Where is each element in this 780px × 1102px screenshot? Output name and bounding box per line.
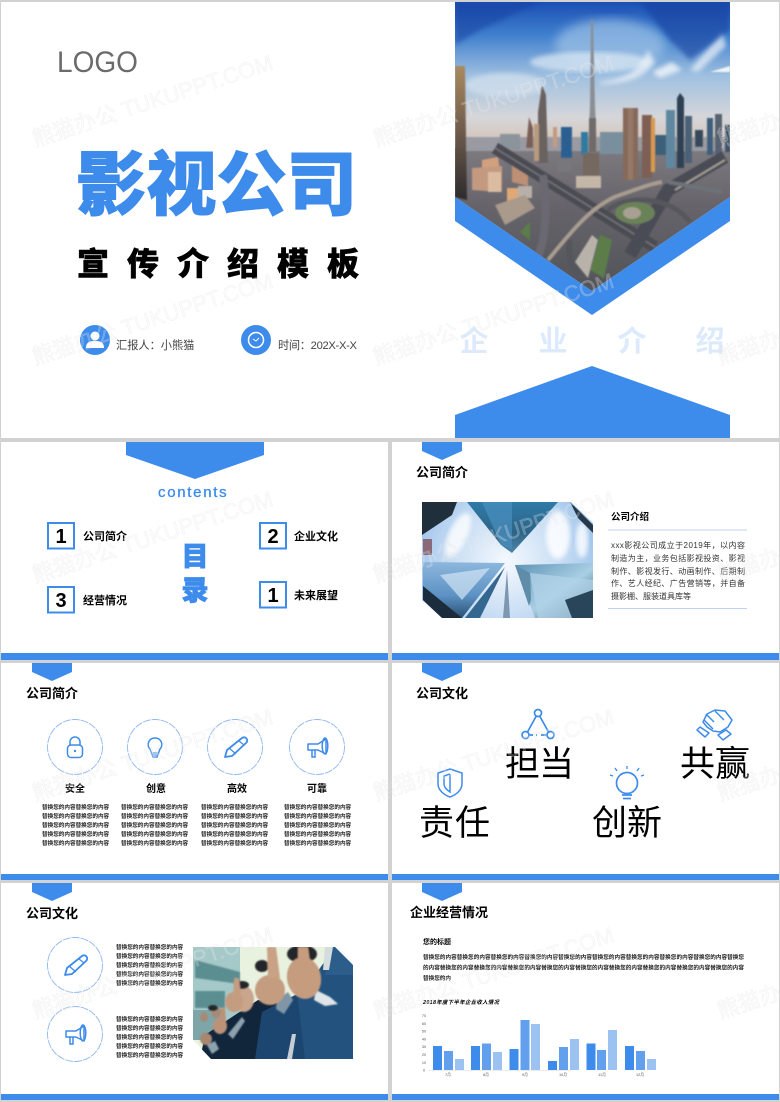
column: creativity: 替换您的内容替换您的内容 (121, 821, 189, 829)
keyword: win-win: 共赢 (680, 745, 750, 784)
watermarks: 熊猫办公 TUKUPPT.COM (29, 922, 276, 1024)
column: reliability: 替换您的内容替换您的内容 (284, 830, 352, 838)
intro paragraph: 制作、影视发行、动画制作、后期制 (611, 566, 745, 576)
main title: 影视公司 (76, 146, 357, 224)
vertical heading: 录 (182, 576, 208, 606)
intro paragraph: 制造为主，业务包括影视投资、影视 (611, 553, 745, 563)
bar chart (422, 1014, 656, 1077)
heading: 公司文化 (26, 906, 78, 921)
item 1: 1 (55, 526, 67, 548)
column: creativity: 替换您的内容替换您的内容 (121, 803, 189, 811)
watermarks: 熊猫办公 TUKUPPT.COM (29, 268, 276, 370)
skyscraper photo (422, 502, 593, 618)
item 4 (260, 582, 338, 608)
blue bottom bar (1, 874, 388, 880)
column: reliability: 替换您的内容替换您的内容 (284, 812, 352, 820)
y axis labels: 60 (422, 1022, 426, 1026)
column: creativity (121, 720, 189, 847)
body text (423, 953, 744, 982)
keyword: duty: 责任 (419, 804, 490, 843)
y axis labels: 10 (422, 1061, 426, 1065)
blue chevron band (455, 197, 730, 315)
skyline (455, 20, 730, 225)
text block 2: 替换您的内容替换您的内容 (116, 1015, 184, 1023)
x axis labels (445, 1072, 644, 1077)
text block 1: 替换您的内容替换您的内容 (116, 970, 184, 978)
column: creativity: 替换您的内容替换您的内容 (121, 830, 189, 838)
intro heading: 公司介绍 (611, 511, 649, 523)
text block 2: 替换您的内容替换您的内容 (116, 1042, 184, 1050)
company intro pale label: 业 (538, 325, 568, 358)
watermarks: 熊猫办公 TUKUPPT.COM (370, 922, 617, 1024)
item 1: 公司简介 (83, 529, 127, 543)
top chevron (32, 883, 72, 901)
slide 3: company profile (392, 442, 779, 660)
item 3: 3 (55, 590, 67, 612)
intro paragraph (611, 540, 745, 601)
y axis labels: 70 (422, 1014, 426, 1018)
contents word: contents (158, 484, 228, 501)
subheading: 您的标题 (423, 937, 451, 946)
text block 1: 替换您的内容替换您的内容 (116, 961, 184, 969)
time item: 时间：202X-X-X (278, 339, 358, 352)
top chevron (422, 442, 462, 460)
column: creativity: 替换您的内容替换您的内容 (121, 812, 189, 820)
x axis labels: 11月 (598, 1072, 606, 1077)
time item (241, 325, 358, 355)
item 4: 1 (267, 585, 279, 607)
y axis labels (422, 1014, 426, 1072)
item 1 (48, 523, 127, 548)
item 3 (48, 587, 127, 612)
intro bottom rule (608, 608, 747, 609)
column: reliability: 替换您的内容替换您的内容 (284, 803, 352, 811)
company intro pale label: 企 (459, 325, 489, 358)
y axis labels: 20 (422, 1053, 426, 1057)
watermarks: 熊猫办公 TUKUPPT.COM (370, 50, 617, 152)
watermarks: 熊猫办公 TUKUPPT.COM (370, 268, 617, 370)
text block 2: 替换您的内容替换您的内容 (116, 1033, 184, 1041)
vertical heading (182, 542, 208, 606)
text block 2: 替换您的内容替换您的内容 (116, 1051, 184, 1059)
text block 1: 替换您的内容替换您的内容 (116, 952, 184, 960)
company intro pale label (459, 325, 725, 358)
x axis labels: 9月 (522, 1072, 528, 1077)
heading: 公司简介 (26, 686, 78, 701)
watermarks: 熊猫办公 TUKUPPT.COM (370, 704, 617, 806)
sky clouds (455, 2, 730, 97)
bottom blue pentagon (455, 366, 730, 438)
column: safety (42, 720, 110, 847)
subtitle: 宣传介绍模板 (77, 246, 377, 282)
blue bottom bar (392, 653, 779, 660)
x axis labels: 10月 (559, 1072, 567, 1077)
blue bottom bar (392, 1094, 779, 1100)
chart title: 2018年度下半年企业收入情况 (422, 999, 500, 1006)
column: creativity: 创意 (146, 782, 166, 795)
column: safety: 替换您的内容替换您的内容 (42, 803, 110, 811)
intro paragraph: 摄影棚、服装道具库等 (611, 591, 691, 601)
heading: 公司简介 (416, 465, 468, 480)
top chevron (422, 883, 462, 901)
reporter item (80, 325, 194, 355)
logo: LOGO (57, 46, 138, 79)
column: safety: 安全 (65, 782, 85, 795)
keyword: responsibility: 担当 (505, 745, 574, 784)
text block 2: 替换您的内容替换您的内容 (116, 1024, 184, 1032)
series 1 (433, 1044, 634, 1070)
y axis labels: 0 (423, 1068, 425, 1072)
column: efficiency: 替换您的内容替换您的内容 (201, 830, 269, 838)
column: safety: 替换您的内容替换您的内容 (42, 812, 110, 820)
x axis labels: 7月 (445, 1072, 451, 1077)
body text: 的内容替换您的内容替换您的内容替换您的内容替换您的内容替换您的内容替换您的内容替换您的内容替换您的内容替换您的内容 (423, 964, 744, 972)
slide 2: contents (1, 442, 388, 660)
column: efficiency: 替换您的内容替换您的内容 (201, 839, 269, 847)
watermarks: 熊猫办公 TUKUPPT.COM (29, 704, 276, 806)
column: efficiency: 高效 (227, 782, 247, 795)
intro paragraph: xxx影视公司成立于2019年，以内容 (611, 540, 745, 550)
icon: shield (438, 769, 462, 797)
column: efficiency: 替换您的内容替换您的内容 (201, 812, 269, 820)
column: safety: 替换您的内容替换您的内容 (42, 821, 110, 829)
watermarks: 熊猫办公 TUKUPPT.COM (29, 50, 276, 152)
slide 1: cover (1, 2, 779, 438)
intro top rule (608, 530, 747, 531)
reporter item: 汇报人：小熊猫 (116, 338, 194, 352)
slide 4: four values (1, 663, 388, 880)
column: reliability: 替换您的内容替换您的内容 (284, 839, 352, 847)
company intro pale label: 介 (617, 325, 647, 358)
body text: 替换您的内容替换您的内容替换您的内容替换您的内容替换您的内容替换您的内容替换您的内容替换您的内容替换您的内容替换您 (423, 953, 744, 961)
intro paragraph: 作、艺人经纪、广告营销等，并自备 (611, 578, 745, 588)
item 3: 经营情况 (83, 593, 127, 607)
text block 2 (116, 1015, 184, 1059)
keyword: innovation: 创新 (592, 804, 662, 843)
x axis labels: 12月 (636, 1072, 644, 1077)
blue bottom bar (1, 1094, 388, 1100)
slide 5: culture keywords (392, 663, 779, 880)
y axis labels: 40 (422, 1038, 426, 1042)
top chevron (422, 663, 462, 681)
heading: 公司文化 (416, 686, 468, 701)
y axis labels: 30 (422, 1045, 426, 1049)
icon: network triangle (522, 710, 554, 738)
series 3 (455, 1024, 656, 1070)
column: efficiency: 替换您的内容替换您的内容 (201, 821, 269, 829)
text block 1: 替换您的内容替换您的内容 (116, 979, 184, 987)
item 2: 企业文化 (294, 529, 338, 543)
column: reliability: 可靠 (307, 782, 327, 795)
highway interchange (492, 142, 728, 262)
series 2 (444, 1020, 645, 1070)
text block 1: 替换您的内容替换您的内容 (116, 943, 184, 951)
company intro pale label: 绍 (695, 325, 725, 358)
item 2 (260, 523, 338, 548)
heading: 企业经营情况 (410, 905, 488, 920)
column: creativity: 替换您的内容替换您的内容 (121, 839, 189, 847)
column: reliability: 替换您的内容替换您的内容 (284, 821, 352, 829)
pencil badge (48, 938, 102, 992)
item 2: 2 (267, 526, 279, 548)
top chevron (126, 442, 264, 479)
body text: 替换您的内 (423, 974, 451, 982)
top chevron (32, 663, 72, 681)
column: efficiency: 替换您的内容替换您的内容 (201, 803, 269, 811)
column: reliability (284, 720, 352, 847)
y axis labels: 50 (422, 1030, 426, 1034)
icon: handshake (697, 710, 732, 740)
column: safety: 替换您的内容替换您的内容 (42, 839, 110, 847)
text block 1 (116, 943, 184, 987)
blue bottom bar (1, 653, 388, 660)
slide 7: business performance (392, 883, 779, 1100)
blue bottom bar (392, 874, 779, 880)
slide 6: culture details (1, 883, 388, 1100)
watermarks: 熊猫办公 TUKUPPT.COM (370, 486, 617, 588)
column: efficiency (201, 720, 269, 847)
thumbs-up photo (193, 945, 353, 1059)
city photo (455, 2, 730, 295)
item 4: 未来展望 (294, 588, 338, 602)
icon: bright bulb (610, 766, 644, 798)
column: safety: 替换您的内容替换您的内容 (42, 830, 110, 838)
vertical heading: 目 (182, 542, 208, 572)
megaphone badge (48, 1006, 102, 1062)
x axis labels: 8月 (483, 1072, 489, 1077)
watermarks: 熊猫办公 TUKUPPT.COM (29, 486, 276, 588)
